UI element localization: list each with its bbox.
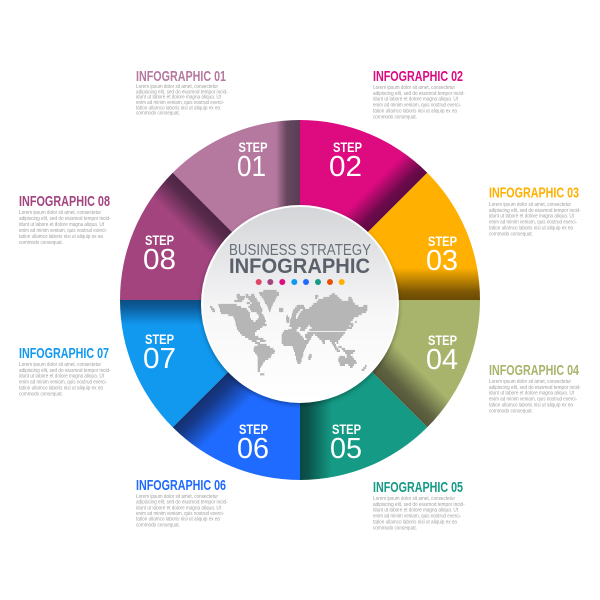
text block: infographic 08: adipiscing elit, sed do eiusmod tempor incid- — [19, 216, 111, 222]
text block: infographic 06: tation ullamco laboris nisi ut aliquip ex ea — [136, 517, 220, 523]
text block: infographic 01: INFOGRAPHIC 01 — [136, 68, 226, 85]
text block: infographic 08: Lorem ipsum dolor sit amet, consectetur — [19, 210, 101, 216]
text block: infographic 04: enim ad minim veniam, quis nostrud exerci- — [489, 397, 577, 403]
text block: infographic 02: Lorem ipsum dolor sit amet, consectetur — [373, 85, 455, 91]
text block: infographic 02: enim ad minim veniam, quis nostrud exerci- — [373, 103, 461, 109]
segment: step 06 — [173, 300, 300, 480]
text block: infographic 07: idunt ut labore et dolore magna aliqua. Ut — [19, 374, 104, 380]
text block: infographic 07: commodo consequat. — [19, 391, 63, 397]
text block: infographic 03: commodo consequat. — [489, 231, 533, 237]
text block: infographic 04 — [489, 362, 581, 414]
text block: infographic 01 — [136, 68, 228, 117]
text block: infographic 02: tation ullamco laboris nisi ut aliquip ex ea — [373, 108, 457, 114]
step label 08: 08 — [143, 244, 176, 276]
text block: infographic 03 — [489, 184, 581, 237]
text block: infographic 04: Lorem ipsum dolor sit amet, consectetur — [489, 379, 571, 385]
text block: infographic 01: tation ullamco laboris nisi ut aliquip ex ea — [136, 105, 220, 111]
text block: infographic 03: Lorem ipsum dolor sit amet, consectetur — [489, 202, 571, 208]
map: europe, asia, africa and australia — [282, 294, 367, 370]
text block: infographic 04: commodo consequat. — [489, 408, 533, 414]
text block: infographic 06: commodo consequat. — [136, 522, 180, 528]
segment: step 01 — [173, 120, 300, 300]
text block: infographic 05: tation ullamco laboris nisi ut aliquip ex ea — [373, 520, 457, 526]
step label 02: STEP — [333, 140, 362, 155]
text block: infographic 08: INFOGRAPHIC 08 — [19, 193, 110, 210]
text block: infographic 08: commodo consequat. — [19, 240, 63, 246]
text block: infographic 08: idunt ut labore et dolore magna aliqua. Ut — [19, 222, 104, 228]
map: americas and greenland — [210, 291, 283, 374]
step label 02: 02 — [329, 151, 362, 183]
text block: infographic 05: idunt ut labore et dolore magna aliqua. Ut — [373, 508, 458, 514]
segment: step 05 — [300, 300, 427, 480]
text block: infographic 07 — [19, 345, 111, 397]
text block: infographic 05: INFOGRAPHIC 05 — [373, 479, 463, 496]
text block: infographic 03: adipiscing elit, sed do eiusmod tempor incid- — [489, 208, 581, 214]
center heading: INFOGRAPHIC — [229, 255, 370, 278]
text block: infographic 04: idunt ut labore et dolore magna aliqua. Ut — [489, 391, 574, 397]
text block: infographic 06: adipiscing elit, sed do eiusmod tempor incid- — [136, 500, 228, 506]
center circle — [201, 206, 399, 405]
segment: step 02 — [300, 120, 427, 300]
text block: infographic 06 — [136, 477, 228, 528]
text block: infographic 06: idunt ut labore et dolore magna aliqua. Ut — [136, 505, 221, 511]
text block: infographic 07: INFOGRAPHIC 07 — [19, 345, 109, 362]
step label 07: STEP — [145, 332, 174, 347]
segment: step 04 — [300, 300, 480, 427]
step label 07: 07 — [143, 343, 176, 375]
text block: infographic 01: enim ad minim veniam, quis nostrud exerci- — [136, 100, 224, 106]
step label 04: STEP — [428, 333, 457, 348]
center heading — [229, 242, 371, 278]
text block: infographic 05: enim ad minim veniam, quis nostrud exerci- — [373, 514, 461, 520]
text block: infographic 01: idunt ut labore et dolore magna aliqua. Ut — [136, 95, 221, 101]
text block: infographic 02: adipiscing elit, sed do eiusmod tempor incid- — [373, 91, 465, 97]
text block: infographic 01: commodo consequat. — [136, 111, 180, 117]
step label 03: STEP — [428, 234, 457, 249]
text block: infographic 02 — [373, 68, 465, 120]
text block: infographic 03: idunt ut labore et dolore magna aliqua. Ut — [489, 214, 574, 220]
text block: infographic 07: adipiscing elit, sed do eiusmod tempor incid- — [19, 368, 111, 374]
text block: infographic 01: Lorem ipsum dolor sit amet, consectetur — [136, 84, 218, 90]
segment: step 07 — [120, 300, 300, 427]
text block: infographic 06: Lorem ipsum dolor sit amet, consectetur — [136, 494, 218, 500]
center heading: BUSINESS STRATEGY — [229, 242, 371, 259]
text block: infographic 04: adipiscing elit, sed do eiusmod tempor incid- — [489, 385, 581, 391]
text block: infographic 02: commodo consequat. — [373, 114, 417, 120]
world map — [210, 291, 367, 374]
text block: infographic 06: enim ad minim veniam, quis nostrud exerci- — [136, 511, 224, 517]
step label 05: STEP — [332, 422, 361, 437]
segment: step 08 — [120, 173, 300, 300]
text block: infographic 03: enim ad minim veniam, quis nostrud exerci- — [489, 220, 577, 226]
text block: infographic 07: enim ad minim veniam, quis nostrud exerci- — [19, 380, 107, 386]
step label 01: STEP — [238, 140, 268, 155]
text block: infographic 05 — [373, 479, 465, 531]
colour dots row — [256, 279, 345, 285]
text block: infographic 02: idunt ut labore et dolore magna aliqua. Ut — [373, 97, 458, 103]
text block: infographic 05: adipiscing elit, sed do eiusmod tempor incid- — [373, 502, 465, 508]
step label 03: 03 — [426, 245, 458, 277]
text block: infographic 05: Lorem ipsum dolor sit amet, consectetur — [373, 496, 455, 502]
donut chart: eight steps — [120, 120, 480, 480]
text block: infographic 08: enim ad minim veniam, quis nostrud exerci- — [19, 228, 107, 234]
text block: infographic 03: tation ullamco laboris nisi ut aliquip ex ea — [489, 226, 573, 232]
segment: step 03 — [300, 173, 480, 300]
text block: infographic 06: INFOGRAPHIC 06 — [136, 477, 226, 494]
step label 08: STEP — [145, 233, 174, 248]
text block: infographic 01: adipiscing elit, sed do eiusmod tempor incid- — [136, 89, 228, 95]
text block: infographic 02: INFOGRAPHIC 02 — [373, 68, 463, 85]
text block: infographic 05: commodo consequat. — [373, 525, 417, 531]
text block: infographic 08 — [19, 193, 111, 246]
text block: infographic 08: tation ullamco laboris nisi ut aliquip ex ea — [19, 234, 103, 240]
step label 05: 05 — [330, 433, 362, 465]
step label 06: 06 — [237, 433, 269, 465]
text block: infographic 07: Lorem ipsum dolor sit amet, consectetur — [19, 362, 101, 368]
text block: infographic 07: tation ullamco laboris nisi ut aliquip ex ea — [19, 386, 103, 392]
step label 06: STEP — [239, 422, 268, 437]
step label 04: 04 — [426, 344, 458, 376]
step label 01: 01 — [237, 151, 266, 183]
text block: infographic 04: tation ullamco laboris nisi ut aliquip ex ea — [489, 402, 573, 408]
